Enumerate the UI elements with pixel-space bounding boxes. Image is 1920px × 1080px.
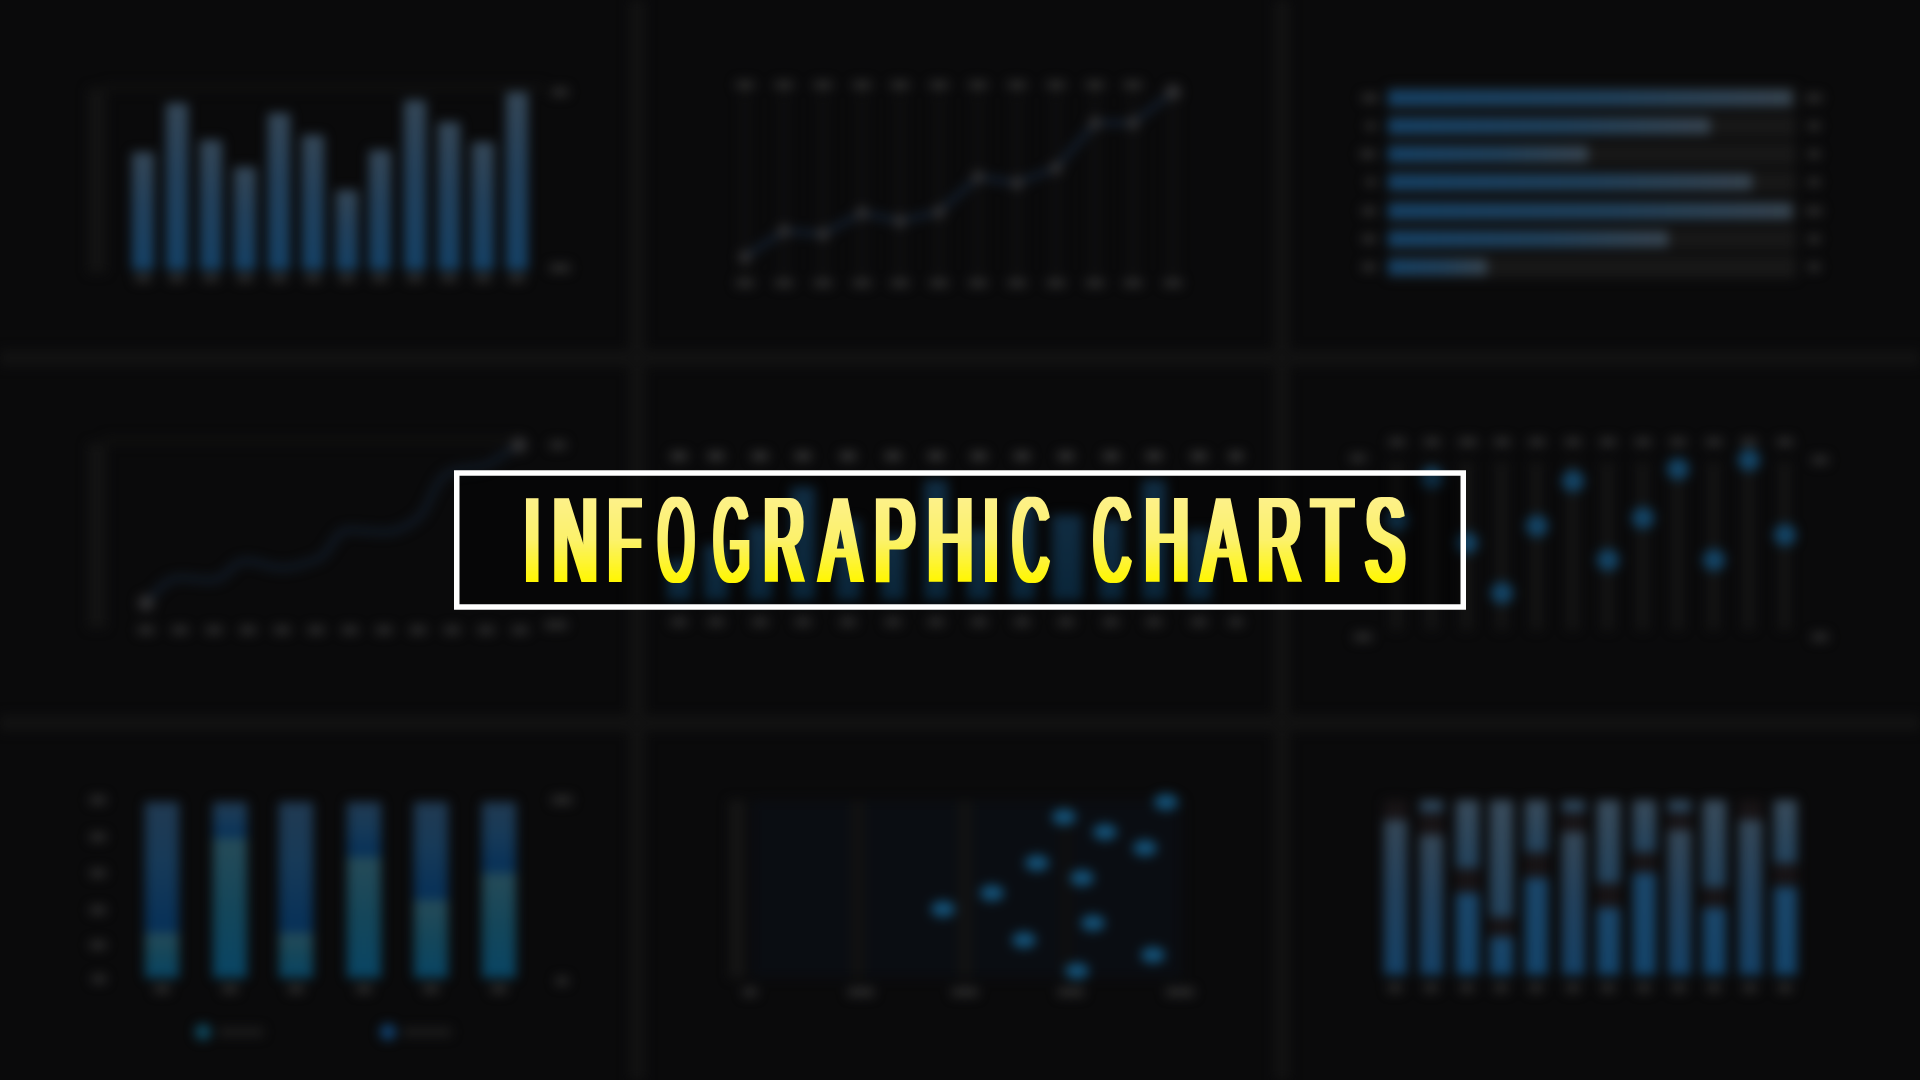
- chart: vertical bars, top left: [88, 84, 570, 282]
- chart: horizontal bars, top right: [1360, 87, 1822, 278]
- title text: R: [764, 473, 804, 609]
- axis labels: [671, 452, 1243, 460]
- title text: A: [1202, 473, 1244, 609]
- title text: F: [609, 471, 640, 608]
- title text: R: [1258, 473, 1301, 609]
- axis labels: [90, 796, 572, 993]
- title text: P: [875, 473, 915, 609]
- axis labels: [138, 441, 567, 634]
- bars: [132, 92, 528, 270]
- title text: H: [1145, 473, 1189, 609]
- slider tracks: [1391, 462, 1790, 630]
- chart: dot slider plot, middle right: [1350, 438, 1828, 641]
- title text: [526, 471, 1404, 609]
- title text: N: [553, 473, 597, 609]
- axis labels: [736, 81, 1182, 287]
- title text: H: [928, 471, 973, 608]
- tracks: [1388, 87, 1796, 278]
- chart: column bars, middle centre (behind the title): [667, 452, 1243, 626]
- chart: smooth line, middle left: [88, 437, 567, 634]
- title text: C: [1012, 471, 1049, 608]
- dots: [1386, 449, 1796, 604]
- gaps: [1384, 800, 1797, 939]
- chart: scatter plot, bottom centre: [729, 794, 1194, 996]
- title box: [457, 473, 1463, 607]
- axis labels: [743, 988, 1194, 996]
- title text: I: [526, 472, 539, 608]
- legend: [195, 1024, 451, 1040]
- axis labels: [1360, 94, 1822, 271]
- bars: [1388, 90, 1792, 275]
- title text: G: [714, 471, 750, 608]
- chart: line with dots, top centre: [736, 81, 1182, 287]
- axis labels: [1388, 984, 1792, 992]
- line: [146, 445, 520, 603]
- upper segments: [145, 802, 516, 933]
- title text: I: [985, 473, 997, 609]
- lower segments: [145, 838, 516, 978]
- lower segments: [1384, 820, 1797, 975]
- data points: [738, 84, 1181, 264]
- title text: T: [1312, 471, 1353, 608]
- scatter points: [931, 794, 1178, 979]
- chart: stacked bars, bottom left: [90, 796, 572, 1040]
- line: [745, 92, 1173, 257]
- title text: O: [658, 472, 694, 608]
- title text: A: [820, 473, 860, 609]
- axis labels: [1350, 438, 1828, 641]
- title text: S: [1366, 473, 1404, 609]
- end dots: [138, 437, 527, 611]
- title text: C: [1093, 471, 1131, 608]
- columns: [667, 480, 1211, 600]
- upper segments: [1420, 800, 1797, 917]
- chart: split bars, bottom right: [1384, 800, 1797, 992]
- axis labels: [135, 88, 570, 282]
